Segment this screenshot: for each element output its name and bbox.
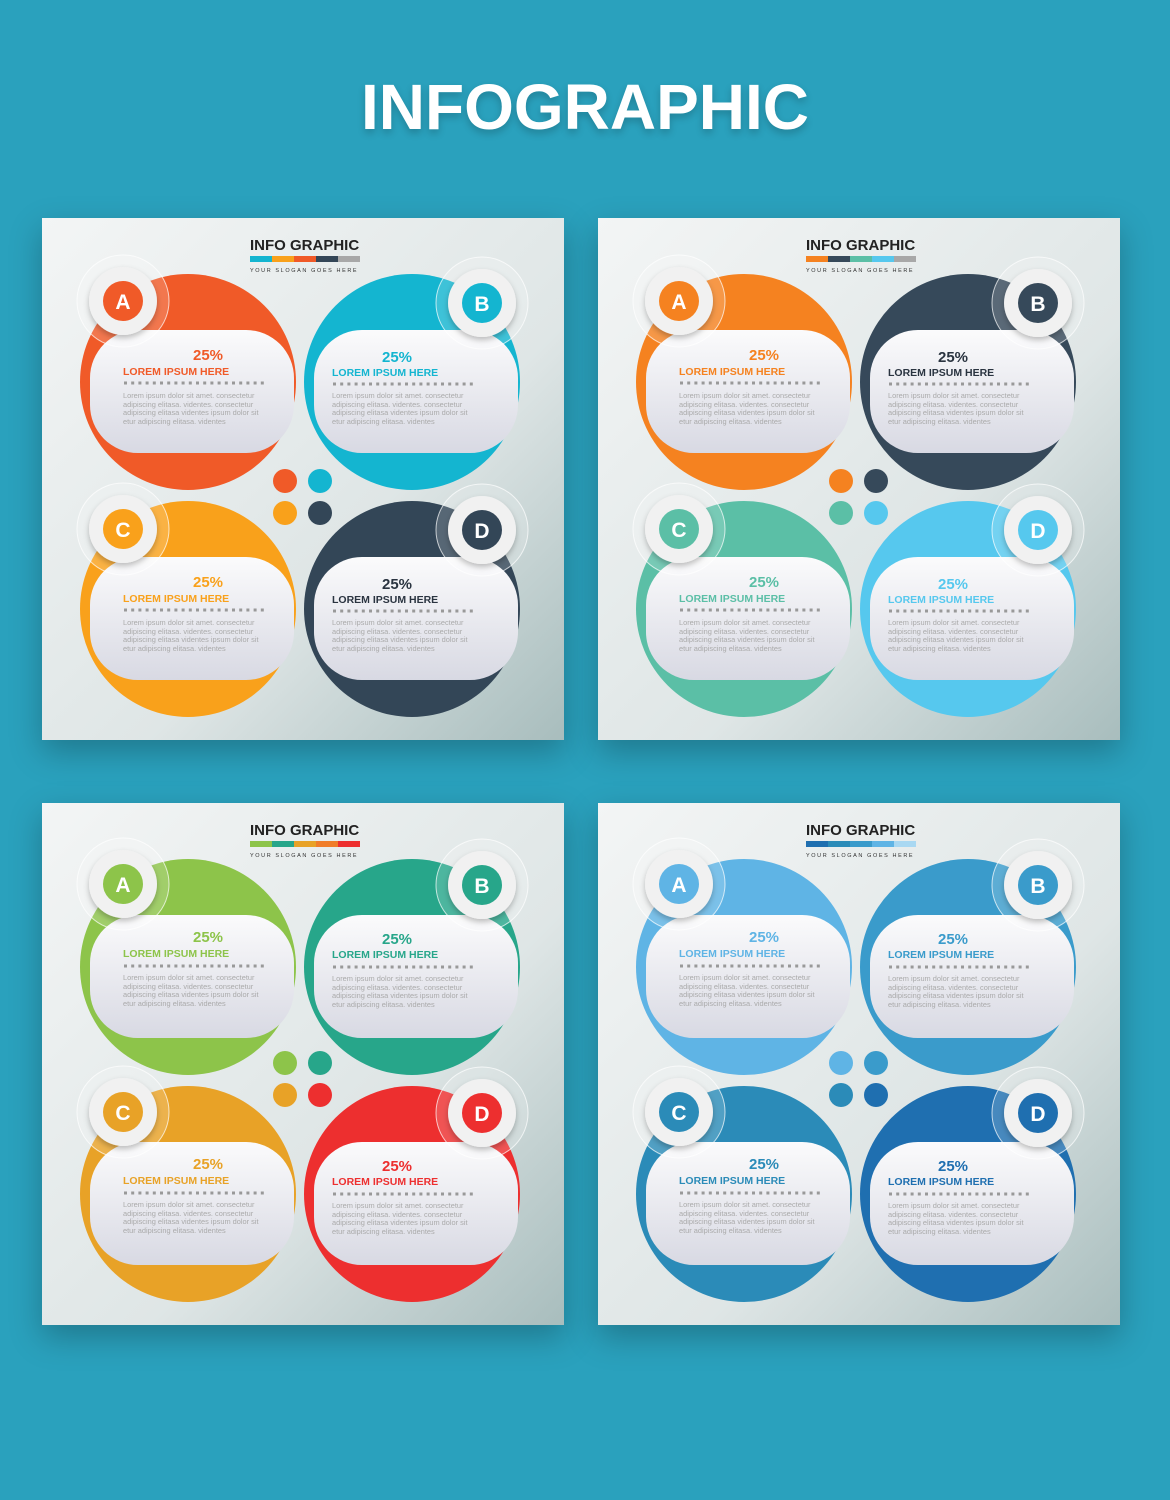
item D: adipiscing elitasa videntes ipsum dolor sit [332,635,468,644]
item B: adipiscing elitasa. videntes. consectetur [332,400,463,409]
item D: Lorem ipsum dolor sit amet. consectetur [888,1201,1020,1210]
item B: LOREM IPSUM HERE [888,949,994,961]
item D: LOREM IPSUM HERE [888,594,994,606]
header: YOUR SLOGAN GOES HERE [250,853,358,859]
item D: D [474,520,490,543]
item A: LOREM IPSUM HERE [679,948,785,960]
item C: 25% [749,1156,779,1173]
item B: B [474,875,490,898]
item A: 25% [749,929,779,946]
item C: etur adipiscing elitasa. videntes [123,644,226,653]
item D [304,1067,528,1302]
item C: 25% [749,574,779,591]
item D: 25% [382,576,412,593]
item A [77,838,296,1075]
item B: etur adipiscing elitasa. videntes [888,1000,991,1009]
item A: adipiscing elitasa videntes ipsum dolor sit [679,990,815,999]
item D: adipiscing elitasa videntes ipsum dolor sit [888,635,1024,644]
item C: C [671,1102,687,1125]
item A: 25% [193,347,223,364]
item A: etur adipiscing elitasa. videntes [123,999,226,1008]
item B: Lorem ipsum dolor sit amet. consectetur [332,391,464,400]
panel: variant 3 (green/teal/yellow/red) [42,803,564,1325]
item A: Lorem ipsum dolor sit amet. consectetur [123,391,255,400]
item C [633,483,852,717]
header: YOUR SLOGAN GOES HERE [806,853,914,859]
item D: Lorem ipsum dolor sit amet. consectetur [888,618,1020,627]
item A: LOREM IPSUM HERE [679,366,785,378]
item D: 25% [938,1158,968,1175]
item A: adipiscing elitasa. videntes. consectetur [123,400,254,409]
header [806,822,916,859]
header: INFO GRAPHIC [806,822,915,839]
item C [633,1066,852,1302]
item B: B [1030,875,1046,898]
item A [77,255,296,490]
item C: LOREM IPSUM HERE [123,1175,229,1187]
title: INFOGRAPHIC [361,71,809,143]
item B: B [1030,293,1046,316]
item D: Lorem ipsum dolor sit amet. consectetur [332,618,464,627]
legend dots [273,469,332,525]
item A: 25% [749,347,779,364]
item B [304,257,528,490]
item C: Lorem ipsum dolor sit amet. consectetur [679,1200,811,1209]
item D: D [474,1103,490,1126]
item B: adipiscing elitasa videntes ipsum dolor sit [332,408,468,417]
legend dots [273,1051,332,1107]
item B [860,839,1084,1075]
item C: etur adipiscing elitasa. videntes [123,1226,226,1235]
item D: adipiscing elitasa. videntes. consectetur [332,1210,463,1219]
item C [77,483,296,717]
item C: etur adipiscing elitasa. videntes [679,1226,782,1235]
item A: Lorem ipsum dolor sit amet. consectetur [679,973,811,982]
item A: etur adipiscing elitasa. videntes [123,417,226,426]
item D [304,484,528,717]
item A: adipiscing elitasa videntes ipsum dolor sit [679,408,815,417]
item B: etur adipiscing elitasa. videntes [332,417,435,426]
item D: etur adipiscing elitasa. videntes [888,1227,991,1236]
item A: adipiscing elitasa. videntes. consectetur [679,400,810,409]
item A: 25% [193,929,223,946]
panel: variant 4 (blues) [598,803,1120,1325]
item C: 25% [193,574,223,591]
item B: adipiscing elitasa videntes ipsum dolor sit [332,991,468,1000]
item A: Lorem ipsum dolor sit amet. consectetur [123,973,255,982]
item D: etur adipiscing elitasa. videntes [332,644,435,653]
item A: etur adipiscing elitasa. videntes [679,417,782,426]
item C: 25% [193,1156,223,1173]
item D: LOREM IPSUM HERE [332,1176,438,1188]
item D: LOREM IPSUM HERE [888,1176,994,1188]
header: INFO GRAPHIC [250,237,359,254]
item A: A [671,874,687,897]
item B: Lorem ipsum dolor sit amet. consectetur [888,391,1020,400]
item A: adipiscing elitasa. videntes. consectetur [123,982,254,991]
item D: adipiscing elitasa. videntes. consectetur [332,627,463,636]
item D [860,1067,1084,1302]
header: INFO GRAPHIC [250,822,359,839]
item B: adipiscing elitasa. videntes. consectetur [332,983,463,992]
item B: adipiscing elitasa videntes ipsum dolor sit [888,991,1024,1000]
item B: LOREM IPSUM HERE [332,949,438,961]
item D [860,484,1084,717]
item A: LOREM IPSUM HERE [123,948,229,960]
legend dots [829,1051,888,1107]
item D: adipiscing elitasa videntes ipsum dolor sit [888,1218,1024,1227]
item A: A [671,291,687,314]
item B: LOREM IPSUM HERE [888,367,994,379]
item A [633,255,852,490]
item D: adipiscing elitasa videntes ipsum dolor sit [332,1218,468,1227]
item B: 25% [382,931,412,948]
item C: adipiscing elitasa. videntes. consectetur [123,627,254,636]
item C: C [671,519,687,542]
item A: etur adipiscing elitasa. videntes [679,999,782,1008]
item D: adipiscing elitasa. videntes. consectetur [888,1210,1019,1219]
item D: 25% [382,1158,412,1175]
item A: A [115,291,131,314]
item B: 25% [938,931,968,948]
item C: etur adipiscing elitasa. videntes [679,644,782,653]
item C: adipiscing elitasa videntes ipsum dolor sit [679,635,815,644]
header: YOUR SLOGAN GOES HERE [806,268,914,274]
item D: 25% [938,576,968,593]
item B: etur adipiscing elitasa. videntes [332,1000,435,1009]
item B [304,839,528,1075]
item B: 25% [382,349,412,366]
item C: Lorem ipsum dolor sit amet. consectetur [123,1200,255,1209]
item C: adipiscing elitasa videntes ipsum dolor sit [123,635,259,644]
header [250,237,360,274]
item C: adipiscing elitasa. videntes. consectetur [123,1209,254,1218]
item B: 25% [938,349,968,366]
item D: etur adipiscing elitasa. videntes [888,644,991,653]
item C: C [115,519,131,542]
item D: D [1030,520,1046,543]
item C: Lorem ipsum dolor sit amet. consectetur [679,618,811,627]
item A: adipiscing elitasa videntes ipsum dolor sit [123,990,259,999]
item D: Lorem ipsum dolor sit amet. consectetur [332,1201,464,1210]
item C: LOREM IPSUM HERE [679,593,785,605]
item C [77,1066,296,1302]
item B: LOREM IPSUM HERE [332,367,438,379]
item A [633,838,852,1075]
item A: adipiscing elitasa videntes ipsum dolor sit [123,408,259,417]
item B: B [474,293,490,316]
item A: LOREM IPSUM HERE [123,366,229,378]
item B: Lorem ipsum dolor sit amet. consectetur [332,974,464,983]
item B: adipiscing elitasa videntes ipsum dolor sit [888,408,1024,417]
item C: adipiscing elitasa videntes ipsum dolor sit [679,1217,815,1226]
item C: Lorem ipsum dolor sit amet. consectetur [123,618,255,627]
legend dots [829,469,888,525]
item B [860,257,1084,490]
header: YOUR SLOGAN GOES HERE [250,268,358,274]
header [250,822,360,859]
header: INFO GRAPHIC [806,237,915,254]
item D: LOREM IPSUM HERE [332,594,438,606]
item C: adipiscing elitasa videntes ipsum dolor sit [123,1217,259,1226]
item C: C [115,1102,131,1125]
item D: etur adipiscing elitasa. videntes [332,1227,435,1236]
header [806,237,916,274]
item A: Lorem ipsum dolor sit amet. consectetur [679,391,811,400]
item A: A [115,874,131,897]
item B: Lorem ipsum dolor sit amet. consectetur [888,974,1020,983]
item C: LOREM IPSUM HERE [679,1175,785,1187]
item C: adipiscing elitasa. videntes. consectetur [679,1209,810,1218]
item C: LOREM IPSUM HERE [123,593,229,605]
item D: D [1030,1103,1046,1126]
panel: variant 2 (orange/navy/teal/sky) [598,218,1120,740]
panel: variant 1 (orange/cyan/yellow/navy) [42,218,564,740]
item D: adipiscing elitasa. videntes. consectetur [888,627,1019,636]
item A: adipiscing elitasa. videntes. consectetur [679,982,810,991]
item C: adipiscing elitasa. videntes. consectetur [679,627,810,636]
item B: etur adipiscing elitasa. videntes [888,417,991,426]
item B: adipiscing elitasa. videntes. consectetur [888,400,1019,409]
item B: adipiscing elitasa. videntes. consectetur [888,983,1019,992]
